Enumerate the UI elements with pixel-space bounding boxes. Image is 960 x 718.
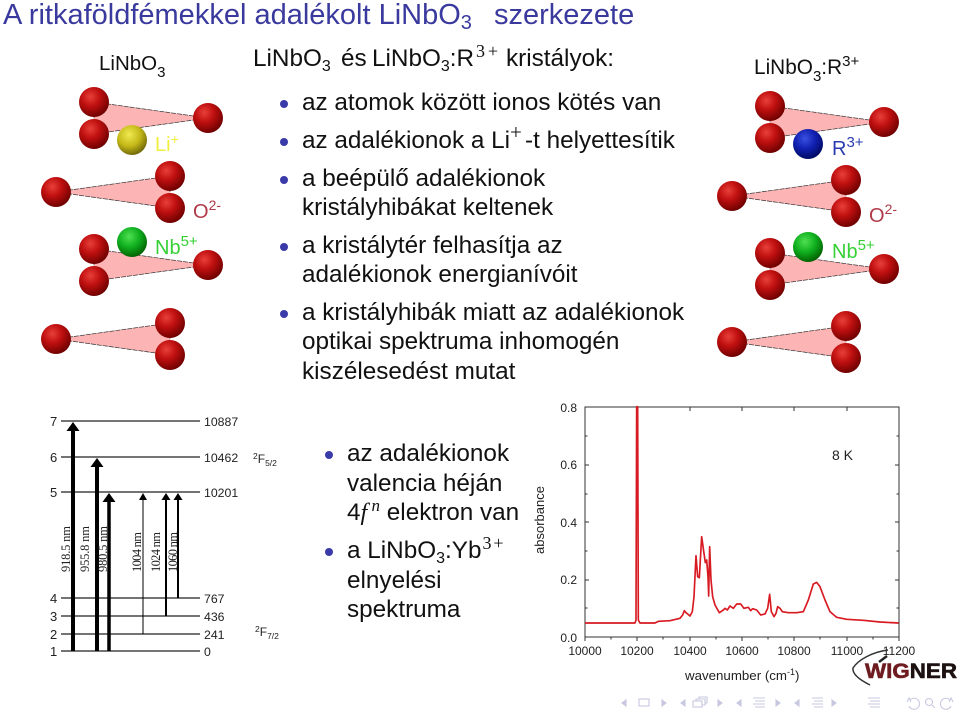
label: R3+: 3+ <box>846 134 864 151</box>
heading: crystals: LiNbO <box>372 45 441 72</box>
wavelength labels: 918.5 nm <box>59 526 73 572</box>
energy level diagram: 7/2 <box>267 631 279 641</box>
annotation: 8 K: 8 K <box>832 447 854 463</box>
bullet: inhomogeneous broadening: a kristályhibák miatt az adalékionok <box>302 299 685 326</box>
heading: LiNbO3:R3+: LiNbO <box>754 56 813 79</box>
bullet: Li substitution: az adalékionok a Li <box>302 127 510 154</box>
wavelength labels: 1004 nm <box>130 532 144 572</box>
bullet: Li substitution: + <box>510 120 522 144</box>
title: 3 <box>461 12 472 34</box>
oxygen triangles <box>56 102 208 355</box>
label: Nb5+: 5+ <box>181 233 198 250</box>
wavelength labels: 1060 nm <box>166 532 180 572</box>
wavelength labels: 955.8 nm <box>78 526 92 572</box>
bullet markers <box>325 451 333 556</box>
bullet: absorption spectrum: a LiNbO <box>347 537 436 564</box>
level energies: 10887 <box>204 415 238 429</box>
document navigation <box>868 698 880 707</box>
x axis title: -1 <box>787 667 795 677</box>
label: O2-: O <box>869 205 885 227</box>
bullet: 4f valence shell: 4 <box>347 499 361 526</box>
x axis tick labels: 11200 <box>883 644 916 658</box>
level energies: 10201 <box>204 486 238 500</box>
x axis title: wavenumber (cm <box>685 668 787 683</box>
level numbers: 5 <box>50 485 57 500</box>
bullet: absorption spectrum: spektruma <box>347 596 461 623</box>
panel: LiNbO3:R3+ crystal structure <box>717 53 899 373</box>
bullet: absorption spectrum: :Yb <box>445 537 482 564</box>
niobium atom <box>117 227 147 257</box>
label: Li+: Li <box>155 134 171 156</box>
bullet: ionic bond: az atomok között ionos kötés van <box>302 89 661 116</box>
niobium atom <box>793 232 823 262</box>
level energies: 436 <box>204 610 225 624</box>
heading: crystals: kristályok: <box>506 45 614 72</box>
x axis title: ) <box>795 668 799 683</box>
term symbols: F <box>258 452 265 466</box>
level numbers: 7 <box>50 414 57 429</box>
y axis tick labels: 0.6 <box>560 458 577 472</box>
oxygen atoms <box>41 87 223 370</box>
bullet: absorption spectrum: 3+ <box>483 533 504 553</box>
bullet: absorption spectrum: elnyelési <box>347 567 442 594</box>
label: Nb5+: 5+ <box>858 237 875 254</box>
frame navigation <box>681 697 722 707</box>
label: R3+: R <box>832 138 846 160</box>
label: O2-: 2- <box>209 197 221 213</box>
section navigation <box>795 698 836 707</box>
panel: crystal description text <box>253 41 685 385</box>
bullet: crystal defects: kristályhibákat keltenek <box>302 194 554 221</box>
heading: LiNbO3:R3+: 3 <box>813 68 821 85</box>
wavelength labels <box>59 526 180 572</box>
level numbers: 4 <box>50 591 57 606</box>
back, search, forward <box>907 698 953 709</box>
transition arrows <box>66 422 182 651</box>
bullet: 4f valence shell: n <box>367 496 380 515</box>
heading: crystals: LiNbO <box>253 45 322 72</box>
label: Nb5+: Nb <box>832 241 858 263</box>
level numbers <box>50 414 57 659</box>
logo wordmark: WIGNER <box>865 660 957 683</box>
level lines <box>61 421 200 651</box>
heading: LiNbO3:R3+: :R <box>821 56 842 79</box>
logo arc <box>853 650 888 685</box>
y axis tick labels: 0.2 <box>560 573 577 587</box>
energy level diagram: 2 <box>255 624 260 634</box>
logo accent <box>879 656 887 662</box>
energy level diagram: F <box>260 625 267 639</box>
y axis title: absorbance <box>532 486 547 554</box>
heading: LiNbO3:R3+: 3+ <box>842 53 859 70</box>
level energies: 241 <box>204 628 225 642</box>
bullet: crystal defects: a beépülő adalékionok <box>302 165 546 192</box>
bullet: inhomogeneous broadening: kiszélesedést mutat <box>302 358 516 385</box>
heading: crystals: és <box>341 45 367 72</box>
spectrum curve <box>585 407 899 623</box>
slide navigation <box>622 699 666 706</box>
plot frame and ticks <box>585 407 899 641</box>
bullet: 4f valence shell: f <box>361 499 371 526</box>
panel: LiNbO3 crystal structure <box>41 52 223 370</box>
level numbers: 6 <box>50 450 57 465</box>
wavelength labels: 1024 nm <box>149 532 163 572</box>
level energies: 767 <box>204 592 225 606</box>
bullet: Li substitution: -t helyettesítik <box>525 127 676 154</box>
y axis tick labels <box>560 401 577 645</box>
level energies: 10462 <box>204 451 238 465</box>
level energies <box>204 415 238 659</box>
y axis tick labels: 0.8 <box>560 401 577 415</box>
heading: crystals: :R <box>450 45 474 72</box>
bullet: absorption spectrum: 3 <box>436 550 445 567</box>
wavelength labels: 980.5 nm <box>96 526 110 572</box>
y axis tick labels: 0.0 <box>560 631 577 645</box>
subsection navigation <box>737 698 780 707</box>
x axis tick labels <box>568 644 916 658</box>
label: Nb5+: Nb <box>155 237 181 259</box>
heading: crystals: 3 <box>441 58 450 75</box>
energy level diagram <box>50 414 279 659</box>
x axis tick labels: 10600 <box>725 644 759 658</box>
bullet markers <box>280 100 288 318</box>
bullet: inhomogeneous broadening: optikai spektruma inhomogén <box>302 328 619 355</box>
heading: crystals: 3 <box>322 58 331 75</box>
level numbers: 2 <box>50 627 57 642</box>
heading: crystals: 3+ <box>476 41 498 61</box>
bullet: 4f valence shell: valencia héján <box>347 470 502 497</box>
level numbers: 1 <box>50 644 57 659</box>
term symbols: 5/2 <box>265 458 277 468</box>
x axis tick labels: 10400 <box>673 644 707 658</box>
x axis tick labels: 10800 <box>777 644 811 658</box>
absorption spectrum chart <box>532 401 916 683</box>
term symbols: 2 <box>253 451 258 461</box>
level numbers: 3 <box>50 609 57 624</box>
label: Li+: + <box>171 131 179 147</box>
lithium atom <box>117 125 147 155</box>
panel: valence and spectrum text <box>325 440 519 623</box>
bullet: 4f valence shell: az adalékionok <box>347 440 510 467</box>
oxygen atoms <box>717 91 899 373</box>
bullet: energy levels: adalékionok energianívóit <box>302 261 578 288</box>
bullet: energy levels: a kristálytér felhasítja az <box>302 232 563 259</box>
rare earth atom <box>793 129 823 159</box>
label: O2-: 2- <box>885 201 897 217</box>
bullet: 4f valence shell: elektron van <box>380 499 519 526</box>
x axis tick labels: 10200 <box>620 644 654 658</box>
level energies: 0 <box>204 645 211 659</box>
x axis tick labels: 10000 <box>568 644 602 658</box>
label: O2-: O <box>193 201 209 223</box>
x axis tick labels: 11000 <box>831 644 864 658</box>
heading: LiNbO3: 3 <box>157 64 165 81</box>
y axis tick labels: 0.4 <box>560 516 577 530</box>
logo: Wigner <box>853 650 957 685</box>
oxygen triangles <box>732 106 884 358</box>
heading: LiNbO3: LiNbO <box>99 52 157 75</box>
navigation symbols <box>622 697 953 709</box>
